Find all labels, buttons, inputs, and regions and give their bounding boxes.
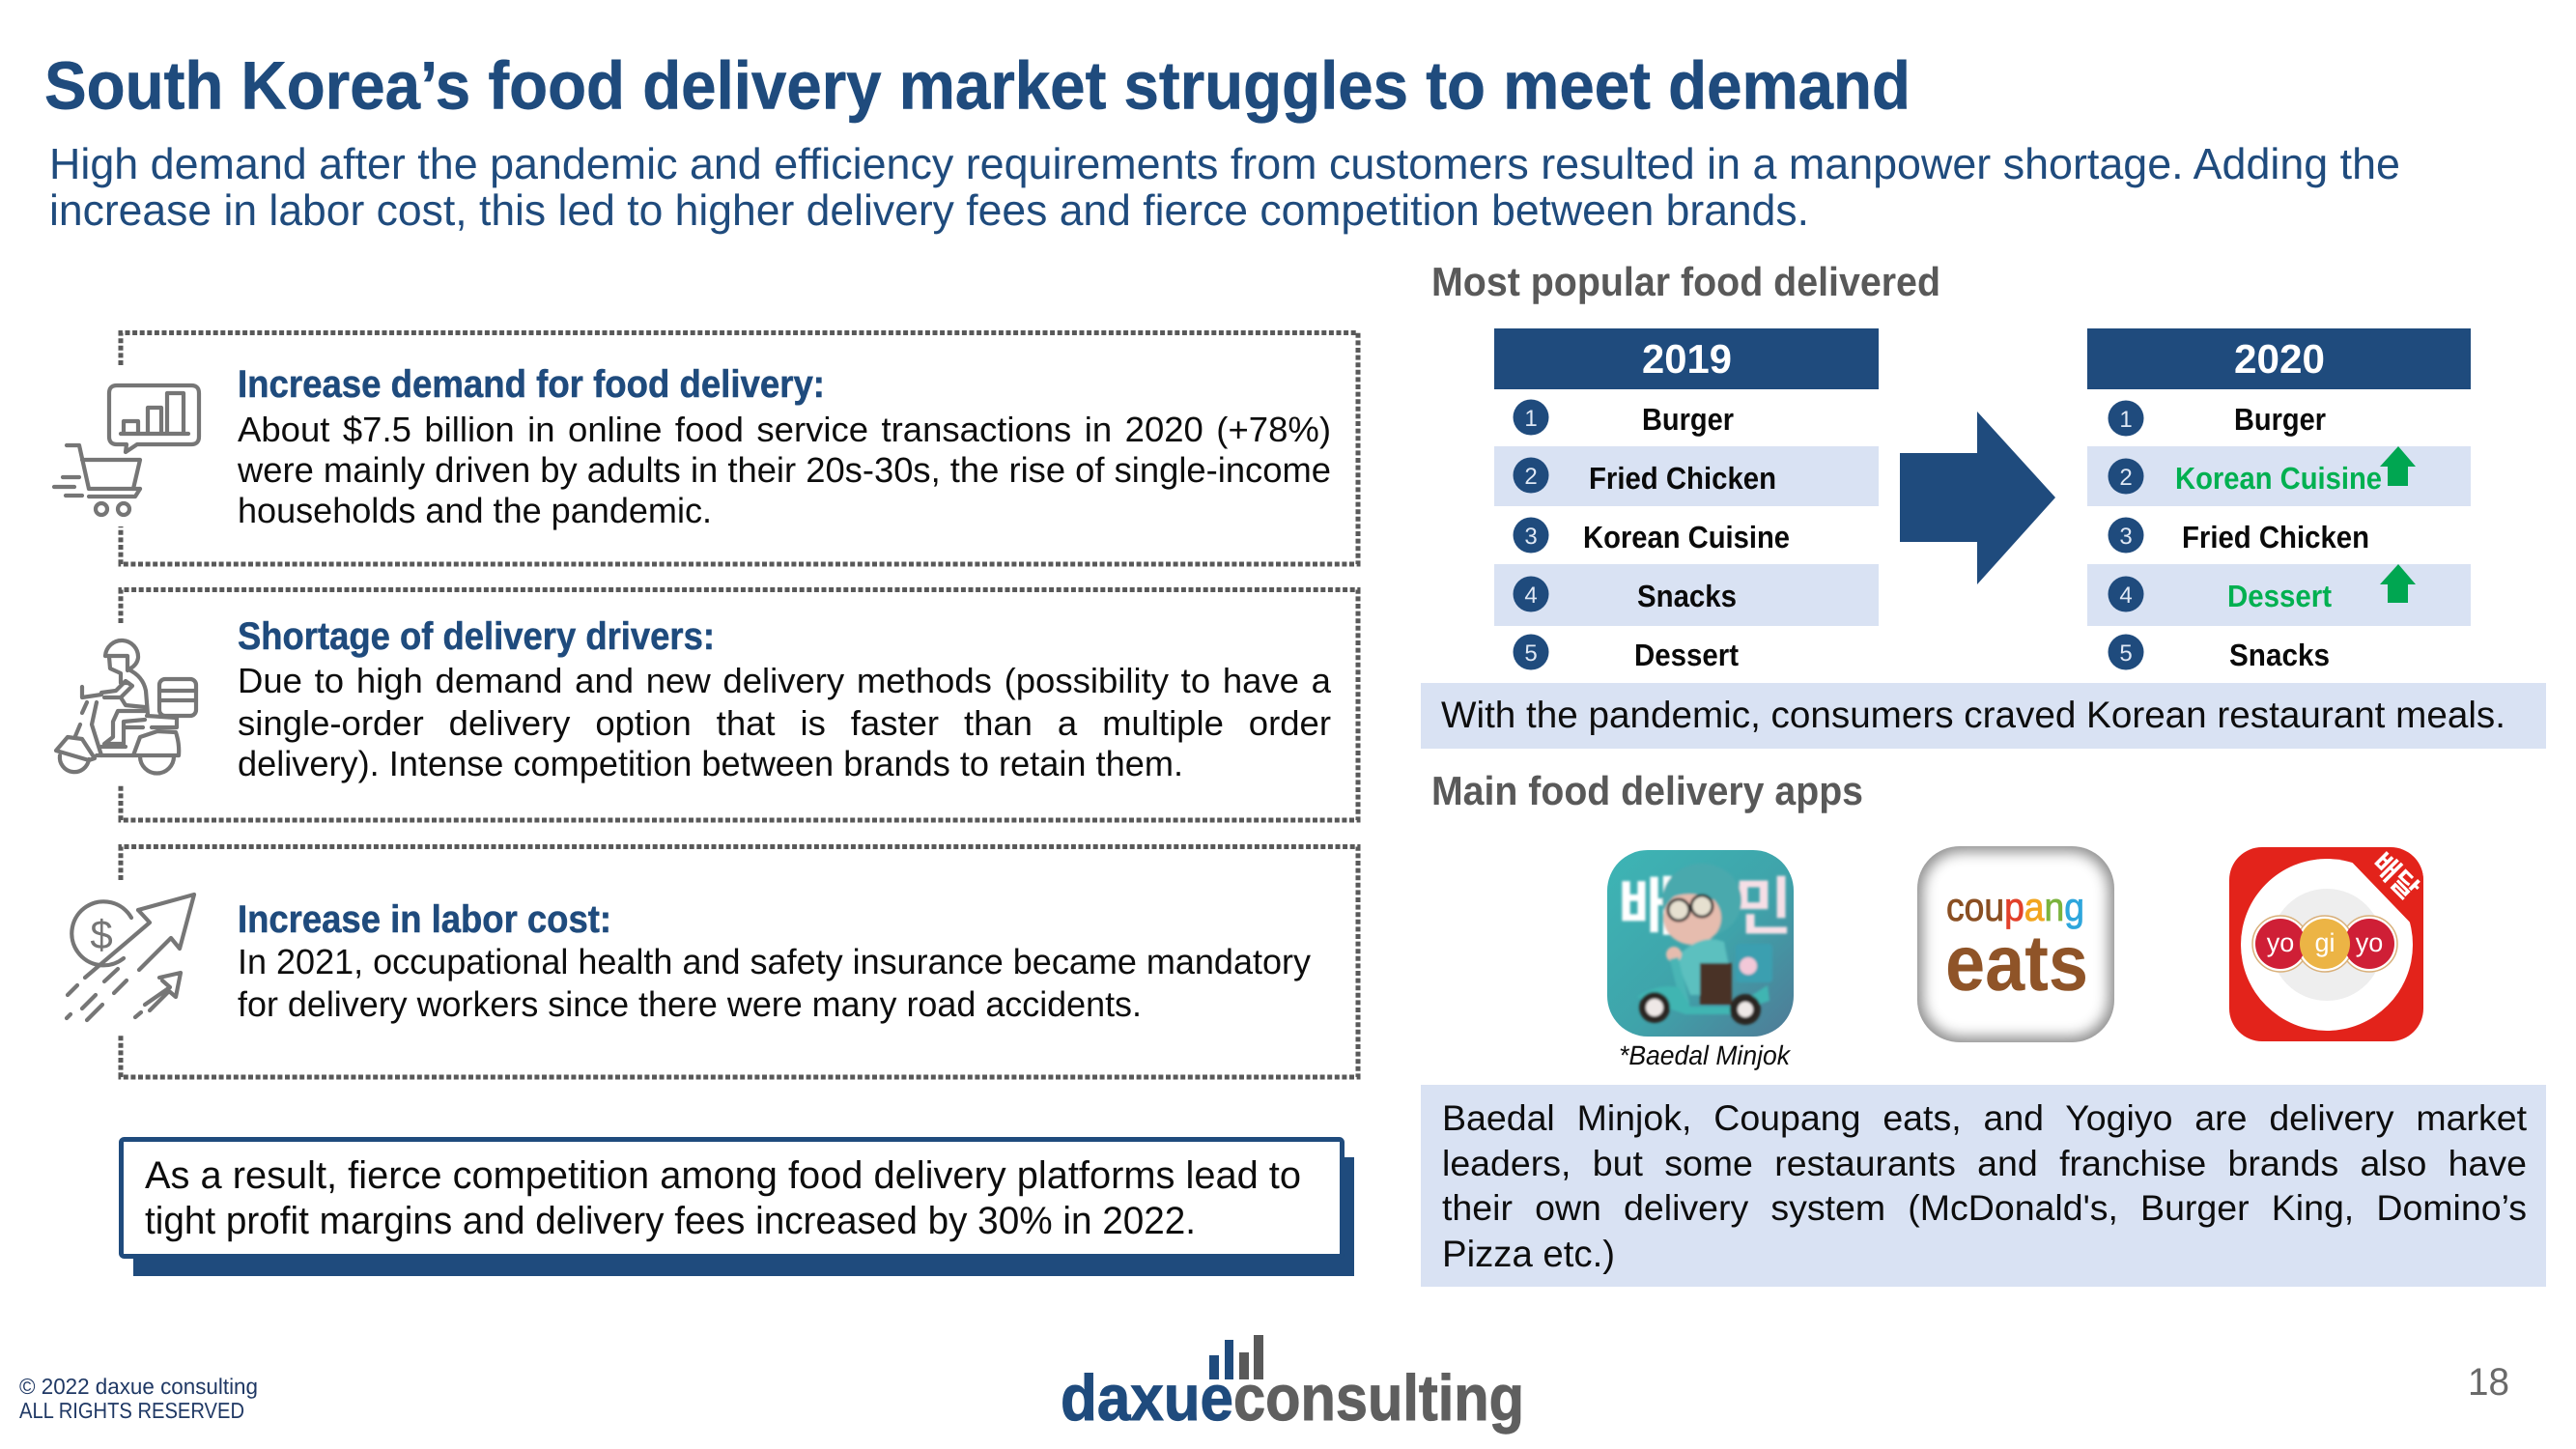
subtitle: increase in labor cost, this led to higher delivery fees and fierce competition between brands.	[49, 185, 1809, 235]
logo: Coupang eats	[1917, 846, 2114, 1042]
heading: labor cost: Increase in labor cost:	[238, 898, 611, 941]
table: 2020 ranking	[2087, 328, 2471, 672]
heading: most popular food: Most popular food delivered	[1431, 259, 1940, 304]
table: 2020 ranking: 1	[2119, 407, 2133, 433]
panel: driver shortage	[56, 589, 1358, 820]
footer: daxue consulting logo: consulting	[1233, 1362, 1524, 1435]
table: 2020 ranking: Dessert	[2227, 579, 2332, 613]
text: driver shortage body	[238, 657, 1331, 783]
table: 2019 ranking: 1	[1524, 406, 1538, 432]
footer: page number: 18	[2468, 1361, 2509, 1404]
table: 2020 ranking: 2020	[2234, 336, 2325, 382]
logo: Yogiyo	[2229, 842, 2429, 1041]
table: 2019 ranking: Burger	[1642, 402, 1734, 437]
logo: Baedal Minjok	[1607, 850, 1794, 1037]
panel: labor cost	[67, 846, 1358, 1077]
text: driver shortage body: delivery). Intense competition between brands to retain them.	[238, 744, 1183, 783]
table: 2019 ranking: Fried Chicken	[1589, 461, 1776, 496]
table: 2020 ranking: Snacks	[2229, 638, 2330, 672]
footer: daxue consulting logo	[1061, 1335, 1524, 1435]
table: 2020 ranking: Korean Cuisine	[2175, 461, 2382, 496]
table: 2020 ranking: 2	[2119, 465, 2133, 491]
callout: pandemic note: With the pandemic, consumers craved Korean restaurant meals.	[1441, 695, 2505, 736]
table: 2020 ranking: Burger	[2234, 402, 2326, 437]
callout: delivery market leaders: Pizza etc.)	[1442, 1234, 1615, 1275]
heading: driver shortage: Shortage of delivery drivers:	[238, 615, 715, 658]
table: 2020 ranking: Fried Chicken	[2182, 520, 2369, 554]
logo: Yogiyo: yo	[2267, 928, 2294, 957]
table: 2020 ranking: 3	[2119, 524, 2133, 550]
callout: result: tight profit margins and delivery fees increased by 30% in 2022.	[145, 1200, 1196, 1242]
subtitle	[49, 139, 2400, 235]
table: 2019 ranking: 4	[1524, 582, 1538, 609]
logo: Yogiyo: 배달	[2364, 842, 2429, 907]
callout: delivery market leaders: their own delivery system (McDonald's, Burger King, Domino’s	[1442, 1187, 2527, 1228]
text: increase demand body	[237, 406, 1331, 530]
footer: copyright	[19, 1374, 258, 1423]
footer: daxue consulting logo: daxue	[1061, 1362, 1233, 1435]
table: 2019 ranking	[1494, 328, 1879, 672]
arrow: 2019 to 2020	[1900, 412, 2055, 584]
logo: Coupang eats: eats	[1945, 920, 2088, 1008]
text: increase demand body: households and the pandemic.	[238, 491, 712, 530]
text: increase demand body: were mainly driven by adults in their 20s-30s, the rise of single-income	[237, 450, 1331, 490]
text: labor cost body: for delivery workers since there were many road accidents.	[238, 984, 1142, 1024]
logo: Baedal Minjok: 민	[1734, 856, 1793, 949]
table: 2019 ranking: 2	[1524, 464, 1538, 490]
icon: shopping cart and chart	[54, 385, 199, 515]
icon: rising cost arrows: $	[90, 912, 113, 957]
table: 2020 ranking: 5	[2119, 640, 2133, 667]
callout: result	[122, 1140, 1354, 1276]
text: driver shortage body: single-order delivery option that is faster than a multiple order	[238, 703, 1331, 742]
callout: delivery market leaders: Baedal Minjok, Coupang eats, and Yogiyo are delivery market	[1442, 1097, 2527, 1138]
icon: green up arrow korean cuisine	[2380, 446, 2416, 486]
panel: increase demand	[54, 332, 1358, 564]
heading: main apps: Main food delivery apps	[1431, 768, 1863, 813]
logo: Baedal Minjok: 배	[1618, 856, 1677, 949]
logo: Coupang eats: coupang	[1946, 885, 2084, 929]
icon: delivery scooter	[56, 640, 196, 773]
table: 2019 ranking: 2019	[1642, 336, 1732, 382]
text: increase demand body: About $7.5 billion in online food service transactions in 2020 (+78%)	[238, 410, 1331, 448]
text: labor cost body	[238, 942, 1312, 1024]
text: labor cost body: In 2021, occupational health and safety insurance became mandatory	[238, 942, 1312, 981]
table: 2019 ranking: 3	[1524, 524, 1538, 550]
heading: increase demand: Increase demand for food delivery:	[238, 363, 825, 406]
logo: Yogiyo: gi	[2314, 928, 2335, 957]
title: South Korea’s food delivery market struggles to meet demand	[44, 48, 1911, 124]
table: 2019 ranking: Snacks	[1637, 579, 1737, 613]
text: driver shortage body: Due to high demand and new delivery methods (possibility to have a	[238, 661, 1331, 699]
icon: rising cost arrows	[67, 895, 194, 1020]
footer: copyright: ALL RIGHTS RESERVED	[19, 1398, 244, 1423]
caption: Baedal Minjok: *Baedal Minjok	[1619, 1040, 1792, 1070]
callout: pandemic note	[1421, 683, 2546, 749]
table: 2019 ranking: Dessert	[1634, 638, 1739, 672]
subtitle: High demand after the pandemic and efficiency requirements from customers resulted in a manpower shortage. Adding the	[49, 139, 2400, 188]
table: 2020 ranking: 4	[2119, 582, 2133, 609]
callout: result: As a result, fierce competition among food delivery platforms lead to	[145, 1154, 1301, 1197]
icon: green up arrow dessert	[2380, 564, 2416, 603]
footer: copyright: © 2022 daxue consulting	[19, 1374, 258, 1399]
table: 2019 ranking: 5	[1524, 640, 1538, 667]
logo: Yogiyo: yo	[2356, 928, 2383, 957]
callout: delivery market leaders: leaders, but some restaurants and franchise brands also have	[1442, 1143, 2527, 1183]
callout: delivery market leaders	[1421, 1085, 2546, 1287]
table: 2019 ranking: Korean Cuisine	[1583, 520, 1790, 554]
